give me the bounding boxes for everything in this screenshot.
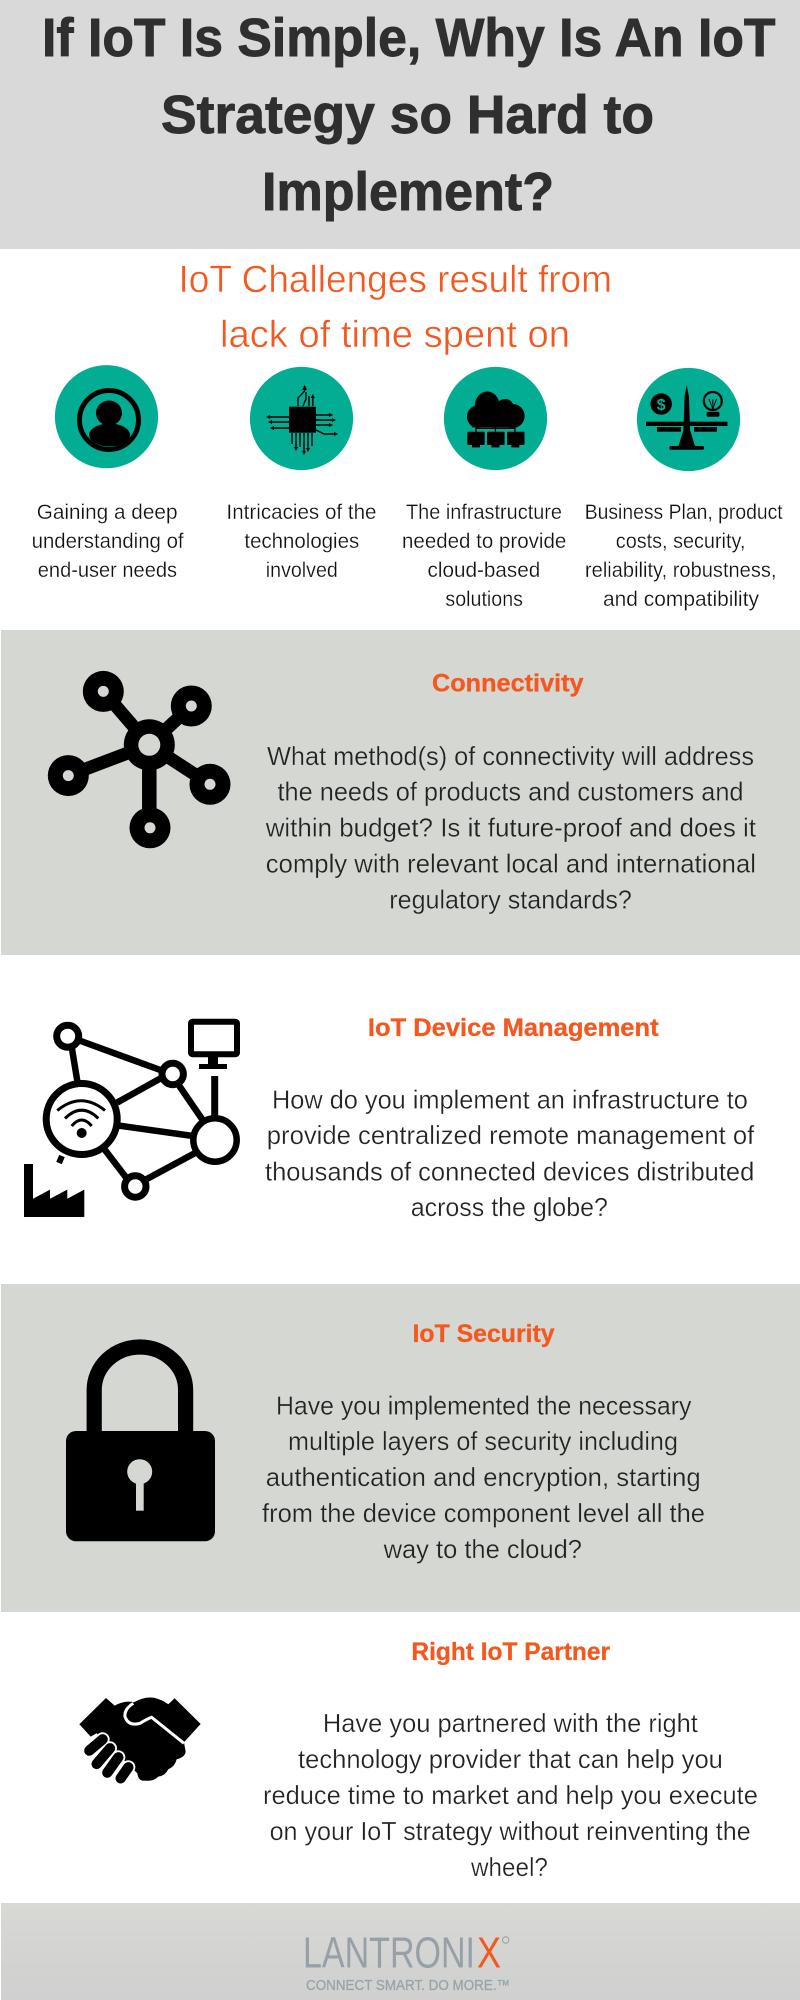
icon: handshake <box>79 1697 201 1781</box>
text: iot device management <box>265 1084 755 1222</box>
label: technologies: Intricacies of the <box>226 501 376 524</box>
label: infrastructure: needed to provide <box>402 530 566 553</box>
subtitle: lack of time spent on <box>220 314 570 356</box>
heading: connectivity: Connectivity <box>432 670 584 698</box>
text: right iot partner: technology provider that can help you <box>298 1744 723 1774</box>
label: business plan: Business Plan, product <box>585 501 783 524</box>
text: iot device management: across the globe? <box>411 1192 608 1222</box>
label: technologies: technologies <box>244 530 359 553</box>
heading: right iot partner: Right IoT Partner <box>411 1638 610 1666</box>
panel: title <box>0 0 800 249</box>
icon: balance scale in teal circle <box>637 368 740 471</box>
text: iot device management: How do you implement an infrastructure to <box>272 1084 748 1114</box>
title: Strategy so Hard to <box>161 85 654 145</box>
text: iot security: Have you implemented the necessary <box>276 1390 691 1420</box>
text: right iot partner: wheel? <box>470 1852 548 1882</box>
label: infrastructure <box>402 501 566 611</box>
text: connectivity: within budget? Is it future-proof and does it <box>265 812 757 842</box>
text: iot security: from the device component level all the <box>262 1498 705 1528</box>
label: business plan: and compatibility <box>603 588 759 611</box>
icon: connectivity hub <box>48 671 230 848</box>
panel: iot device management <box>24 1014 755 1222</box>
logo: lantronix: CONNECT SMART. DO MORE.™ <box>306 1978 510 1994</box>
title: If IoT Is Simple, Why Is An IoT <box>42 8 776 68</box>
text: iot security: way to the cloud? <box>383 1534 582 1564</box>
label: technologies <box>226 501 376 582</box>
label: business plan: reliability, robustness, <box>585 559 776 582</box>
label: business plan: costs, security, <box>616 530 745 553</box>
subtitle <box>178 259 612 356</box>
heading: iot security: IoT Security <box>412 1320 555 1348</box>
text: connectivity: the needs of products and customers and <box>278 777 744 807</box>
panel: footer <box>1 1903 800 2000</box>
title <box>42 8 776 222</box>
text: right iot partner <box>263 1708 758 1882</box>
text: right iot partner: reduce time to market and help you execute <box>263 1780 758 1810</box>
heading: iot device management: IoT Device Management <box>368 1014 659 1042</box>
label: end-user needs: Gaining a deep <box>37 501 178 524</box>
panel: four challenges <box>32 365 783 611</box>
icon: device network <box>24 1022 237 1217</box>
label: infrastructure: The infrastructure <box>406 501 562 524</box>
text: iot device management: provide centralized remote management of <box>267 1120 755 1150</box>
text: iot security: multiple layers of security including <box>288 1426 678 1456</box>
text: connectivity: What method(s) of connectivity will address <box>267 741 754 771</box>
title: Implement? <box>262 162 554 222</box>
logo: lantronix: X <box>477 1929 501 1977</box>
text: right iot partner: Have you partnered with the right <box>323 1708 699 1738</box>
text: iot device management: thousands of connected devices distributed <box>265 1156 754 1186</box>
panel: iot security <box>1 1284 800 1612</box>
icon: microchip in teal circle <box>250 367 353 470</box>
text: iot security: authentication and encryption, starting <box>266 1462 701 1492</box>
label: end-user needs <box>32 501 184 582</box>
icon: padlock <box>66 1347 215 1541</box>
text: right iot partner: on your IoT strategy without reinventing the <box>270 1816 751 1846</box>
label: infrastructure: solutions <box>445 588 523 611</box>
icon: cloud network in teal circle <box>444 367 547 470</box>
icon: user in teal circle <box>55 365 158 468</box>
text: iot security <box>262 1390 705 1564</box>
label: business plan <box>585 501 783 611</box>
text: connectivity: regulatory standards? <box>389 884 632 914</box>
logo: lantronix: LANTRONI <box>303 1929 475 1977</box>
text: connectivity: comply with relevant local and international <box>266 848 756 878</box>
label: technologies: involved <box>266 559 338 582</box>
text: connectivity <box>265 741 757 914</box>
label: end-user needs: end-user needs <box>38 559 177 582</box>
label: end-user needs: understanding of <box>32 530 184 553</box>
icon: balance scale in teal circle: $ <box>657 397 666 414</box>
panel: connectivity <box>1 630 800 955</box>
subtitle: IoT Challenges result from <box>178 259 612 301</box>
panel: right iot partner <box>79 1638 758 1882</box>
label: infrastructure: cloud-based <box>428 559 540 582</box>
